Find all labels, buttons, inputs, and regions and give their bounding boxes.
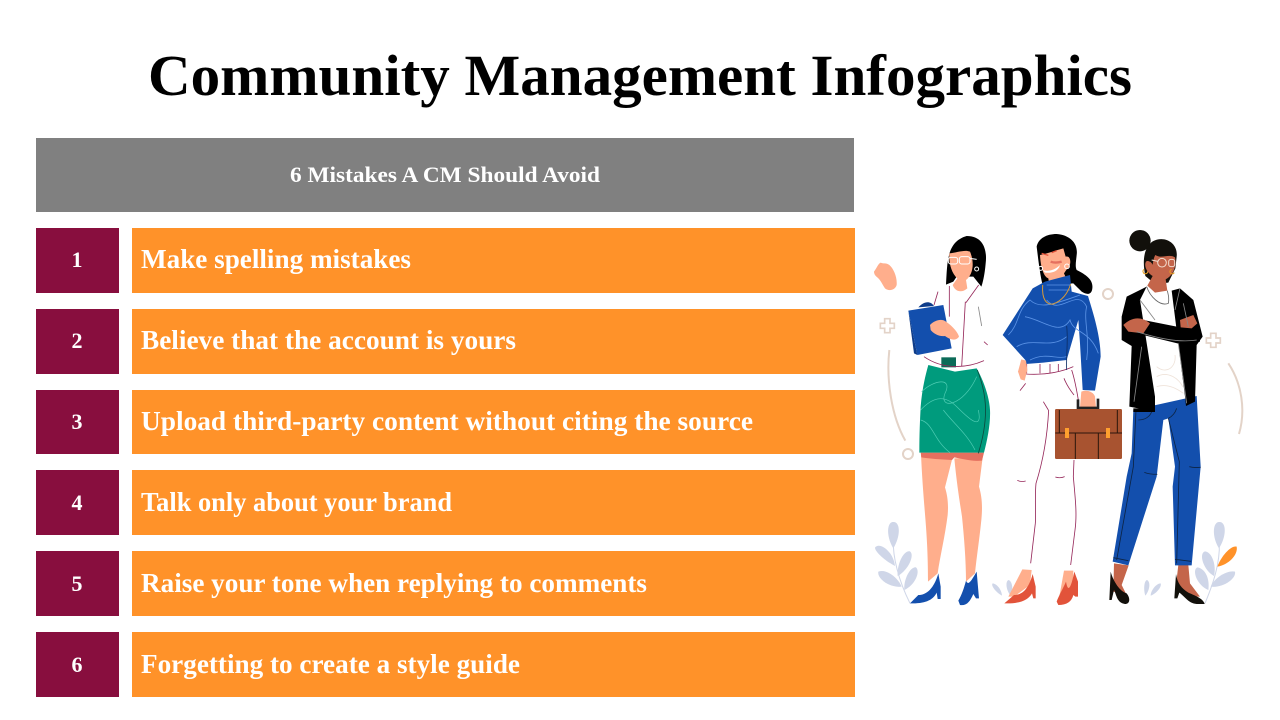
header bar: 6 Mistakes A CM Should Avoid <box>290 162 600 187</box>
row 6: 6 <box>72 652 82 677</box>
title: Community Management Infographics <box>148 43 1132 108</box>
row 1: 1 <box>72 247 82 272</box>
plant: left <box>875 522 918 603</box>
row 4: Talk only about your brand <box>141 487 452 517</box>
row 5: 5 <box>72 571 82 596</box>
row 1 <box>36 228 855 293</box>
figure: woman with clipboard <box>874 236 990 605</box>
row 1: Make spelling mistakes <box>141 244 411 274</box>
row 5 <box>36 551 855 616</box>
row 3: Upload third-party content without citing the source <box>141 406 753 436</box>
row 3 <box>36 390 855 454</box>
row 3: 3 <box>72 409 82 434</box>
row 2: 2 <box>72 328 82 353</box>
illustration: three businesswomen <box>874 230 1242 605</box>
row 4 <box>36 470 855 535</box>
row 6 <box>36 632 855 697</box>
row 2 <box>36 309 855 374</box>
header bar <box>36 138 854 212</box>
plant: right <box>1195 522 1237 603</box>
row 5: Raise your tone when replying to comments <box>141 568 647 598</box>
figure: woman with crossed arms <box>1109 230 1205 604</box>
row 2: Believe that the account is yours <box>141 325 516 355</box>
grass tufts <box>992 580 1161 596</box>
decorative shapes <box>880 289 1242 459</box>
row 6: Forgetting to create a style guide <box>141 649 520 679</box>
row 4: 4 <box>72 490 82 515</box>
figure: woman with briefcase <box>1003 234 1122 605</box>
